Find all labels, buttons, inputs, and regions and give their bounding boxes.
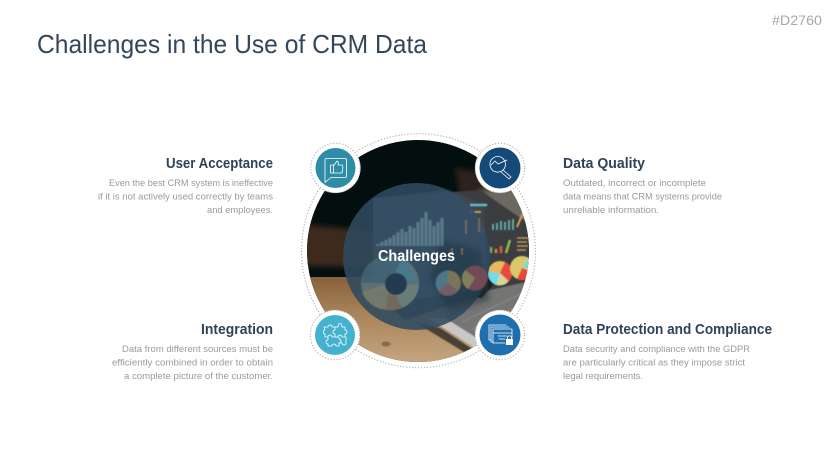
text block: user acceptance: if it is not actively used correctly by teams — [98, 192, 273, 202]
screen panel inside circle — [373, 189, 488, 300]
dotted outer ring — [302, 134, 536, 368]
pie charts inside circle — [436, 266, 488, 296]
text block: user acceptance: User Acceptance — [166, 156, 273, 172]
photo: background behind screen — [478, 186, 528, 232]
text block: data protection and compliance: legal requirements. — [563, 371, 643, 382]
faded bars inside circle — [452, 218, 479, 255]
text block: data protection and compliance: are particularly critical as they impose strict — [563, 358, 745, 368]
text block: integration: efficiently combined in order to obtain — [112, 358, 273, 368]
text block: data quality: Data Quality — [563, 156, 645, 172]
text block: integration: Data from different sources must be — [122, 344, 273, 355]
text block: data protection and compliance: Data security and compliance with the GDPR — [563, 344, 750, 355]
title: Challenges in the Use of CRM Data — [37, 29, 427, 59]
icon: puzzle pieces — [310, 310, 360, 360]
photo: desk knot — [382, 342, 390, 346]
text block: data quality: Outdated, incorrect or incomplete — [563, 178, 706, 189]
text block: data protection and compliance — [563, 322, 772, 382]
text block: user acceptance: and employees. — [207, 205, 273, 216]
icon: thumbs up speech bubble — [310, 143, 360, 193]
icon: magnifying glass with chart — [475, 143, 525, 193]
text block: integration — [112, 322, 273, 382]
donut chart inside circle — [361, 256, 419, 310]
document code: #D2760 — [772, 12, 822, 28]
text block: data protection and compliance: Data Protection and Compliance — [563, 322, 772, 338]
text block: data quality: data means that CRM systems provide — [563, 192, 722, 202]
text block: user acceptance: Even the best CRM system is ineffective — [109, 178, 273, 189]
photo: screen — [396, 190, 529, 320]
photo: laptop keyboard — [418, 278, 524, 352]
central photo of laptop with charts — [307, 140, 529, 362]
dark hands inside circle — [430, 240, 490, 312]
photo: forearm — [307, 222, 350, 270]
photo: upper hand — [455, 168, 515, 198]
text block: integration: a complete picture of the customer. — [124, 371, 273, 382]
area bar chart inside circle — [378, 212, 442, 246]
centre label: Challenges — [378, 248, 455, 265]
icon: secure documents with padlock — [475, 310, 525, 360]
photo: wooden desk — [310, 277, 526, 362]
photo: bright charts on screen — [470, 205, 534, 286]
translucent centre circle with label — [343, 183, 490, 330]
text block: integration: Integration — [201, 322, 273, 338]
text block: data quality — [563, 156, 722, 216]
text block: data quality: unreliable information. — [563, 205, 659, 216]
text block: user acceptance — [98, 156, 273, 216]
